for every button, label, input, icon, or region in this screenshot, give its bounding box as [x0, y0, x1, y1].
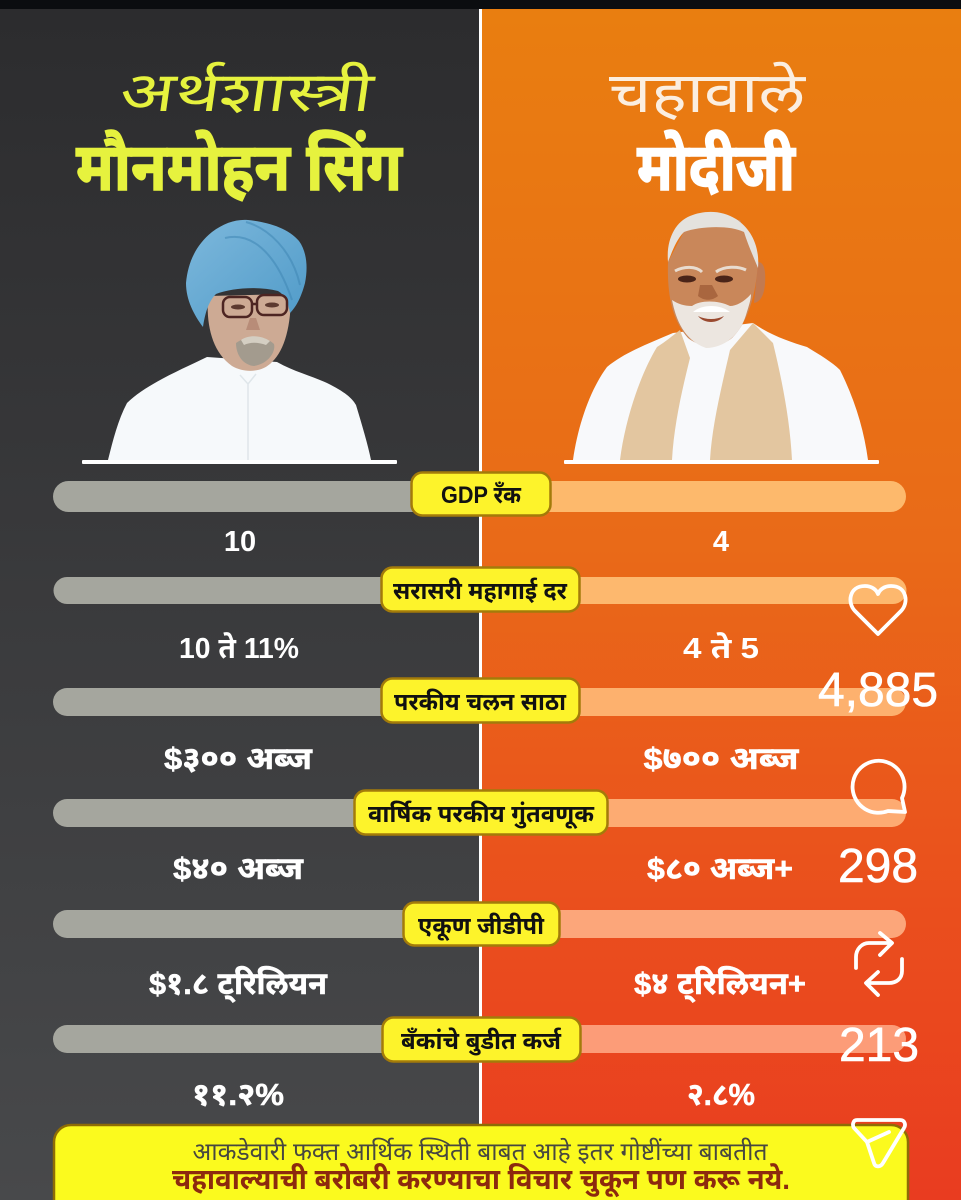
icon: heart — [850, 586, 906, 634]
values: investment left: $४० अब्ज — [173, 851, 304, 886]
row: GDP rank — [53, 472, 906, 516]
heading: right: मोदीजी — [637, 129, 796, 205]
row: average inflation: सरासरी महागाई दर — [393, 577, 567, 605]
footer callout: चहावाल्याची बरोबरी करण्याचा विचार चुकून पण करू नये. — [172, 1162, 790, 1197]
values: forex left: $३०० अब्ज — [164, 741, 313, 776]
portrait base line: left — [82, 460, 397, 464]
heading: left: मौनमोहन सिंग — [76, 129, 403, 205]
comment count: 298 — [838, 840, 918, 893]
values: inflation left: 10 ते 11% — [179, 631, 299, 665]
panel: right orange background — [479, 9, 961, 1200]
row: forex reserves: परकीय चलन साठा — [394, 688, 567, 716]
portrait base line: right — [564, 460, 879, 464]
row: total GDP — [53, 902, 906, 946]
row: bank bad loans: बँकांचे बुडीत कर्ज — [401, 1027, 562, 1056]
row: total GDP: एकूण जीडीपी — [418, 912, 545, 941]
footer callout — [54, 1125, 908, 1200]
values: bad loans left: ११.२% — [192, 1077, 284, 1112]
panel: left dark background — [0, 9, 479, 1200]
row: bank bad loans — [53, 1018, 906, 1062]
row: GDP rank: GDP रँक — [441, 481, 522, 509]
heading: left — [76, 61, 403, 205]
row: average inflation — [54, 568, 906, 612]
icon: repost arrows — [856, 933, 902, 995]
portrait: left (turbaned man in white) — [108, 220, 371, 460]
left bar — [53, 481, 479, 512]
values: total GDP right: $४ ट्रिलियन+ — [634, 966, 806, 1002]
icon: send arrow — [853, 1120, 905, 1166]
values: inflation right: 4 ते 5 — [683, 631, 759, 665]
icon: comment bubble — [853, 761, 905, 813]
repost count: 213 — [839, 1019, 919, 1072]
values: forex right: $७०० अब्ज — [644, 741, 799, 776]
heading: right: चहावाले — [609, 61, 806, 124]
heading: right — [609, 61, 806, 205]
heading: left: अर्थशास्त्री — [116, 61, 379, 123]
like count: 4,885 — [818, 664, 938, 717]
label pill — [412, 472, 550, 516]
footer callout: आकडेवारी फक्त आर्थिक स्थिती बाबत आहे इतर गोष्टींच्या बाबतीत — [192, 1136, 768, 1166]
row: annual foreign investment: वार्षिक परकीय गुंतवणूक — [368, 800, 595, 829]
values: GDP rank right: 4 — [713, 526, 729, 558]
top black strip — [0, 0, 961, 9]
values: bad loans right: २.८% — [687, 1077, 755, 1112]
values: total GDP left: $१.८ ट्रिलियन — [149, 966, 328, 1002]
row: annual foreign investment — [53, 790, 906, 834]
right bar — [482, 481, 906, 512]
centre divider — [479, 9, 482, 1200]
portrait: right (man in white with beige scarf) — [573, 212, 868, 460]
values: investment right: $८० अब्ज+ — [647, 851, 793, 886]
row: forex reserves — [53, 678, 906, 722]
values: GDP rank left: 10 — [224, 526, 256, 558]
